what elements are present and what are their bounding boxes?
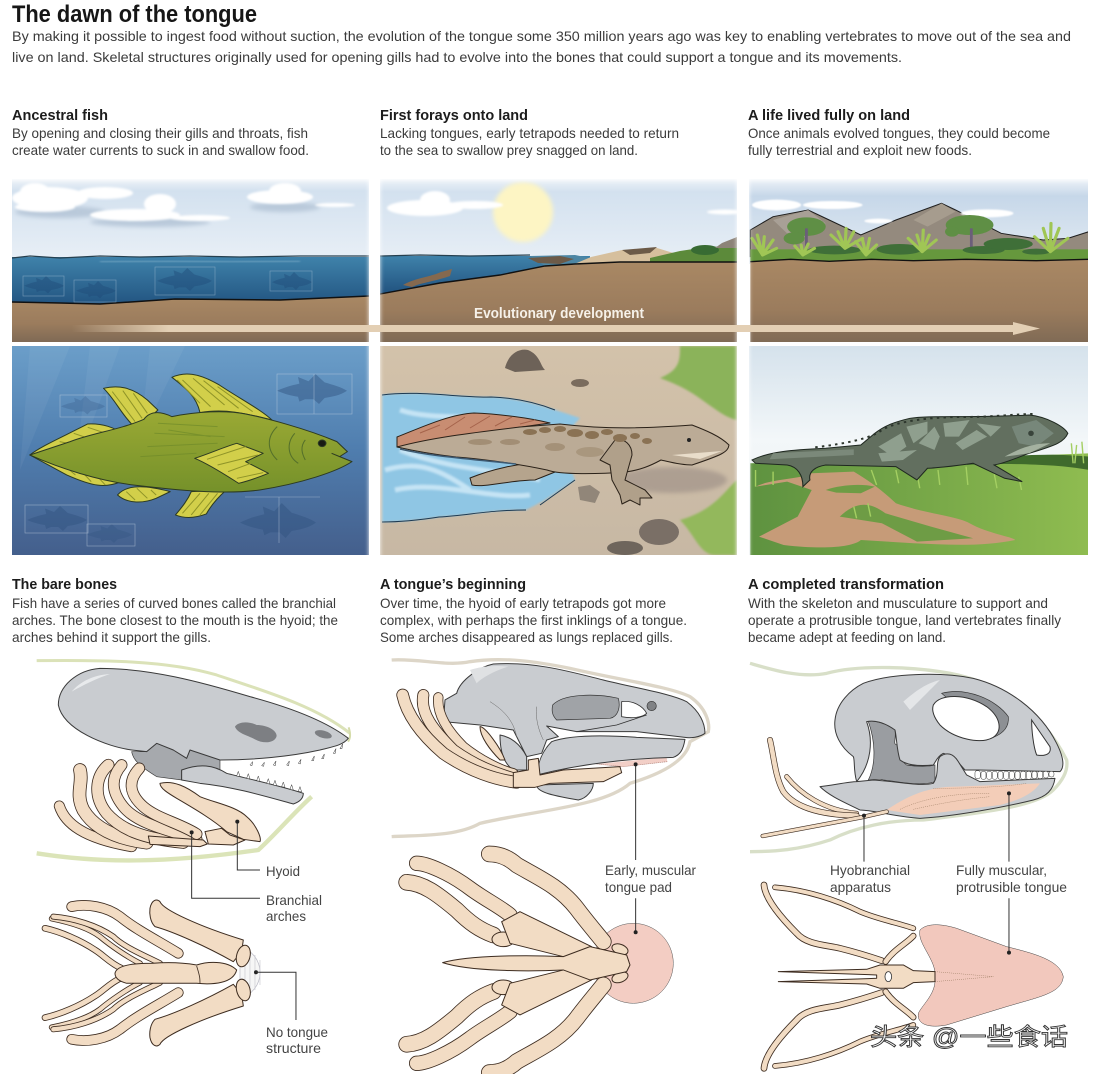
callout lines: lizard [862,791,1011,955]
text block: a tongue's beginning: A tongue’s beginning [380,577,526,593]
label: fully muscular protrusible tongue: protrusible tongue [956,879,1067,895]
panel: fish anatomy diagrams [37,660,350,1056]
label: branchial arches [266,892,322,924]
label: fully muscular protrusible tongue: Fully muscular, [956,862,1047,878]
panel: shoreline landscape [380,179,743,342]
label: early muscular tongue pad: Early, muscular [605,862,696,878]
label: early muscular tongue pad [605,862,696,895]
label: hyobranchial apparatus: apparatus [830,879,891,895]
text block: the bare bones: Fish have a series of curved bones called the branchial [12,595,336,611]
text block: a completed transformation [748,577,1061,645]
text block: ancestral fish: By opening and closing their gills and throats, fish [12,125,308,141]
label: hyobranchial apparatus: Hyobranchial [830,862,910,878]
label: hyobranchial apparatus [830,862,910,895]
callout lines: tongue pad [634,762,638,934]
label: branchial arches: arches [266,908,306,924]
icon: lizard [752,414,1068,487]
text block: a tongue's beginning [380,577,687,645]
intro text [12,28,1071,65]
callout lines: fish [190,820,296,1020]
label: hyoid: Hyoid [266,863,300,879]
label: no tongue structure [266,1024,328,1056]
text block: a life lived fully on land: Once animals evolved tongues, they could become [748,125,1050,141]
label: fully muscular protrusible tongue [956,862,1067,895]
text block: a completed transformation: operate a protrusible tongue, land vertebrates finally [748,612,1061,628]
tetrapod skull side view [392,660,709,837]
intro text: live on land. Skeletal structures originally used for opening gills had to evolve into the bones that could support a tongue and its movements. [12,49,902,65]
text block: a completed transformation: With the skeleton and musculature to support and [748,595,1048,611]
lizard skull side view [750,663,1067,852]
soft white panel dividers [8,172,1092,558]
text block: a tongue's beginning: Over time, the hyoid of early tetrapods got more [380,595,666,611]
fish hyoid ventral view [45,900,260,1046]
panel: shore scene with tetrapod [380,346,737,555]
text block: a completed transformation: became adept at feeding on land. [748,629,946,645]
intro text: By making it possible to ingest food without suction, the evolution of the tongue some 350 million years ago was key to enabling vertebrates to move out of the sea and [12,28,1071,44]
text block: the bare bones: The bare bones [12,577,117,593]
arrow: evolutionary development [72,306,1040,335]
arrow: evolutionary development: Evolutionary development [474,306,644,322]
tetrapod tongue pad ventral view [407,854,673,1073]
panel: ocean landscape [12,179,369,342]
grass patches [660,346,737,555]
text block: first forays onto land [380,108,679,158]
label: no tongue structure: structure [266,1040,321,1056]
text block: the bare bones: arches. The bone closest to the mouth is the hyoid; the [12,612,338,628]
text block: a life lived fully on land: fully terrestrial and exploit new foods. [748,142,972,158]
text block: first forays onto land: to the sea to swallow prey snagged on land. [380,142,638,158]
label: no tongue structure: No tongue [266,1024,328,1040]
title: The dawn of the tongue [12,1,257,28]
text block: a life lived fully on land: A life lived fully on land [748,108,910,124]
text block: a tongue's beginning: Some arches disappeared as lungs replaced gills. [380,629,673,645]
icon: early tetrapod [397,413,729,505]
lizard tongue ventral view [764,885,1063,1068]
fish skull side view [37,660,350,860]
text block: a completed transformation: A completed transformation [748,577,944,593]
panel: land landscape [749,179,1089,343]
text block: the bare bones [12,577,338,645]
watermark: 头条 @一些食话 [870,1024,1068,1051]
label: early muscular tongue pad: tongue pad [605,879,672,895]
icon: coelacanth fish [30,374,352,518]
panel: fish underwater scene [12,346,369,555]
label: branchial arches: Branchial [266,892,322,908]
rocks and footprints [505,350,679,555]
text block: first forays onto land: First forays onto land [380,108,528,124]
text block: a tongue's beginning: complex, with perhaps the first inklings of a tongue. [380,612,687,628]
text block: a life lived fully on land [748,108,1050,158]
text block: the bare bones: arches behind it support the gills. [12,629,211,645]
water pool [382,393,580,522]
text block: ancestral fish: create water currents to suck in and swallow food. [12,142,309,158]
panel: early tetrapod anatomy diagrams [392,660,709,1073]
text block: first forays onto land: Lacking tongues, early tetrapods needed to return [380,125,679,141]
text block: ancestral fish: Ancestral fish [12,108,108,124]
panel: land scene with lizard [749,346,1089,557]
panel: land vertebrate anatomy diagrams [750,663,1067,1068]
text block: ancestral fish [12,108,309,158]
